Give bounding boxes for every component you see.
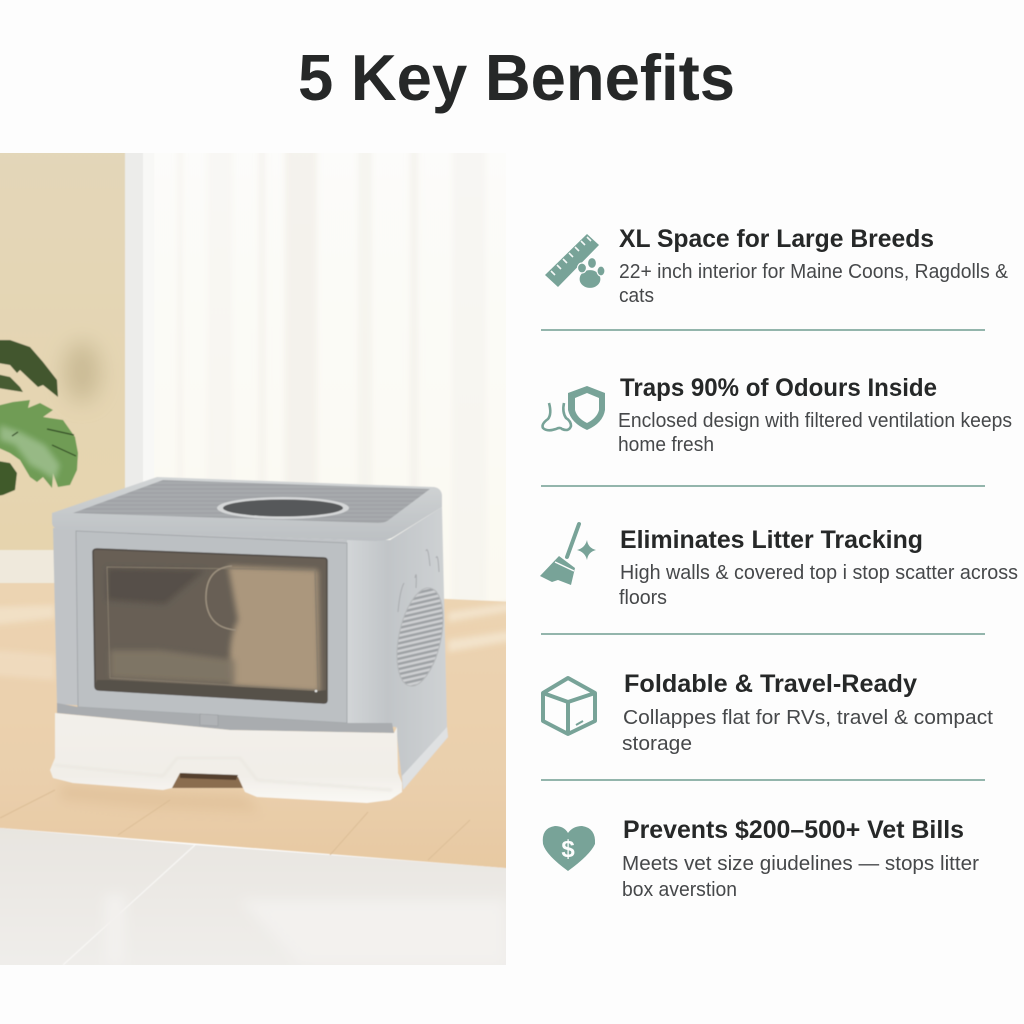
lid top xyxy=(73,480,430,523)
description: Collappes flat for RVs, travel & compact xyxy=(623,707,993,729)
description: 22+ inch interior for Maine Coons, Ragdolls & xyxy=(619,261,1009,283)
baseboard xyxy=(0,550,54,584)
title: 5 Key Benefits xyxy=(298,41,735,114)
heading: Foldable & Travel-Ready xyxy=(624,670,917,698)
description: High walls & covered top i stop scatter across xyxy=(620,562,1018,584)
icon: heart with dollar: $ xyxy=(561,836,575,863)
plant xyxy=(0,340,78,497)
icon: box xyxy=(543,678,595,734)
heading: XL Space for Large Breeds xyxy=(619,225,934,253)
description: home fresh xyxy=(618,434,714,456)
tray lip shading xyxy=(54,758,392,790)
white base tray xyxy=(50,713,402,803)
icon: broom and sparkle xyxy=(540,524,596,585)
box front wall xyxy=(53,528,347,724)
description: box averstion xyxy=(622,879,737,901)
lid rim xyxy=(52,477,442,541)
benefit 5 xyxy=(543,816,979,901)
litter box xyxy=(50,477,451,803)
tray top notch shade xyxy=(180,773,238,780)
wall xyxy=(0,141,128,553)
icon: nose and shield xyxy=(543,386,605,430)
front door panel xyxy=(76,531,347,723)
tile seam xyxy=(74,845,195,955)
panel: product photo xyxy=(0,141,518,977)
benefit 2 xyxy=(543,374,1012,456)
side lower lip xyxy=(402,727,448,790)
icon: ruler and paw xyxy=(545,234,605,288)
tray shadow notch xyxy=(172,773,243,788)
icon: heart with dollar xyxy=(543,826,595,871)
wood floor xyxy=(0,583,518,869)
tile reflection xyxy=(105,895,506,965)
center clasp xyxy=(200,714,218,726)
window frame xyxy=(124,153,144,488)
description: floors xyxy=(619,587,667,609)
description: Meets vet size giudelines — stops litter xyxy=(622,853,979,875)
box side wall xyxy=(347,507,448,790)
wall shadow xyxy=(64,342,100,402)
heading: Prevents $200–500+ Vet Bills xyxy=(623,816,964,844)
description: storage xyxy=(622,733,692,755)
white floor tile xyxy=(0,828,506,965)
heading: Eliminates Litter Tracking xyxy=(620,526,923,554)
side vent xyxy=(396,549,444,686)
benefit 3 xyxy=(540,524,1018,609)
description: cats xyxy=(619,285,654,307)
curtain xyxy=(154,141,518,603)
heading: Traps 90% of Odours Inside xyxy=(620,374,937,402)
lower grey band xyxy=(57,703,394,733)
description: Enclosed design with filtered ventilation keeps xyxy=(618,410,1012,432)
benefit 4 xyxy=(543,670,993,755)
window xyxy=(93,549,327,703)
top hole xyxy=(217,497,349,519)
benefit 1 xyxy=(545,225,1009,307)
